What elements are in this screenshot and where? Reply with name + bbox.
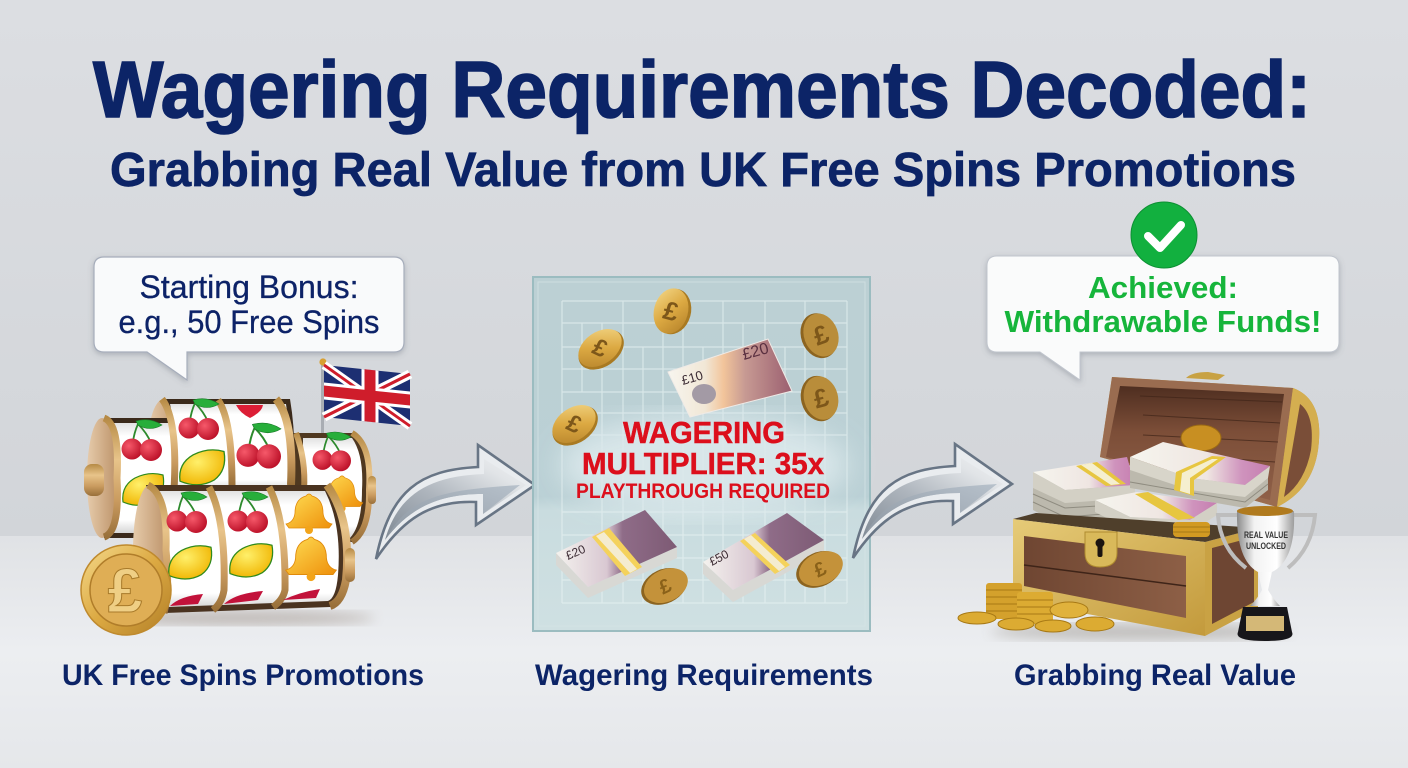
arrow: promotions to wagering (376, 445, 535, 559)
chest shadow (990, 624, 1290, 640)
coin (544, 397, 605, 454)
background floor (0, 536, 1408, 768)
cash stack left: £20 (564, 542, 588, 563)
coin (649, 284, 696, 338)
callout: achieved: Withdrawable Funds! (1004, 304, 1322, 339)
banknote: £20 (740, 340, 771, 364)
trophy: REAL VALUE (1244, 530, 1288, 540)
trophy: UNLOCKED (1246, 541, 1286, 551)
label: Grabbing Real Value: Grabbing Real Value (1014, 659, 1296, 692)
coin (794, 308, 845, 363)
coin: £ (656, 575, 675, 599)
slot reels (81, 399, 376, 635)
reel shadow (105, 611, 375, 625)
text halo (559, 415, 849, 515)
subheading: Grabbing Real Value from UK Free Spins Promotions (110, 144, 1296, 197)
callout: starting bonus: e.g., 50 Free Spins (118, 304, 380, 340)
icon: pound coin: £ (108, 557, 142, 626)
coin: £ (809, 318, 833, 352)
coin (796, 371, 843, 425)
coin: £ (562, 409, 586, 440)
lid coin (1181, 425, 1221, 451)
cash stacks (1033, 442, 1270, 532)
coin: £ (811, 558, 830, 582)
callout: starting bonus (94, 257, 404, 380)
trophy (1218, 506, 1315, 641)
coin (570, 321, 631, 378)
banknote: £10 (680, 367, 705, 388)
right reel (293, 432, 376, 542)
icon: pound coin (81, 545, 171, 635)
panel: glass wagering block (533, 277, 870, 631)
treasure chest (958, 372, 1319, 641)
multiplier text: MULTIPLIER: 35x (582, 446, 825, 481)
callout text: Starting Bonus: (140, 269, 358, 305)
icon: green check (1131, 202, 1197, 268)
banknote (668, 339, 792, 417)
main heading: Wagering Requirements Decoded: (93, 45, 1311, 134)
middle reel end cap (148, 399, 180, 491)
coin (635, 560, 694, 612)
label: UK Free Spins Promotions: UK Free Spins Promotions (62, 659, 424, 692)
front reel (133, 485, 355, 615)
multiplier text: WAGERING (623, 415, 785, 450)
cash stack right (703, 513, 824, 602)
coin (790, 543, 849, 595)
coin: £ (660, 295, 682, 327)
cash stack left (556, 510, 677, 598)
chest body (1013, 513, 1258, 636)
callout text: Achieved: (1088, 270, 1238, 305)
label: Wagering Requirements: Wagering Requirements (535, 659, 873, 692)
grid (562, 301, 847, 603)
cash stack right: £50 (707, 547, 731, 569)
multiplier text (576, 415, 830, 503)
callout: achieved (987, 256, 1339, 380)
arrow: wagering to real value (853, 444, 1012, 558)
background wall (0, 0, 1408, 536)
chest lid (1100, 372, 1319, 507)
coin: £ (588, 333, 612, 364)
gold coin stacks (958, 522, 1210, 632)
icon: union jack flag (319, 358, 410, 434)
middle reel (162, 399, 294, 490)
multiplier text: PLAYTHROUGH REQUIRED (576, 480, 830, 503)
coin: £ (810, 382, 832, 414)
title (93, 45, 1311, 197)
back left reel (84, 418, 174, 538)
